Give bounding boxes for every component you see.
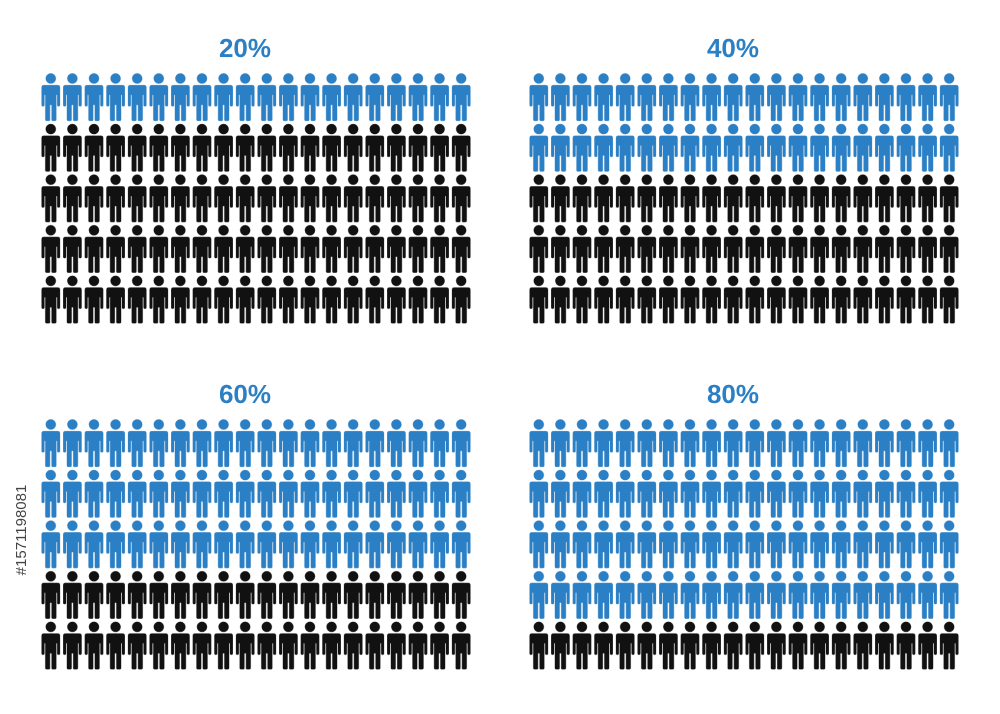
title: 40%: 40%: [707, 33, 759, 63]
panel: 60% grid: [40, 419, 472, 672]
panel: 40% grid: [528, 73, 960, 326]
title: 80%: 80%: [707, 379, 759, 409]
title: 60%: 60%: [219, 379, 271, 409]
panel: 80% grid: [528, 419, 960, 672]
panel: 20% grid: [40, 73, 472, 326]
watermark id: #1571198081: [13, 485, 30, 575]
title: 20%: 20%: [219, 33, 271, 63]
